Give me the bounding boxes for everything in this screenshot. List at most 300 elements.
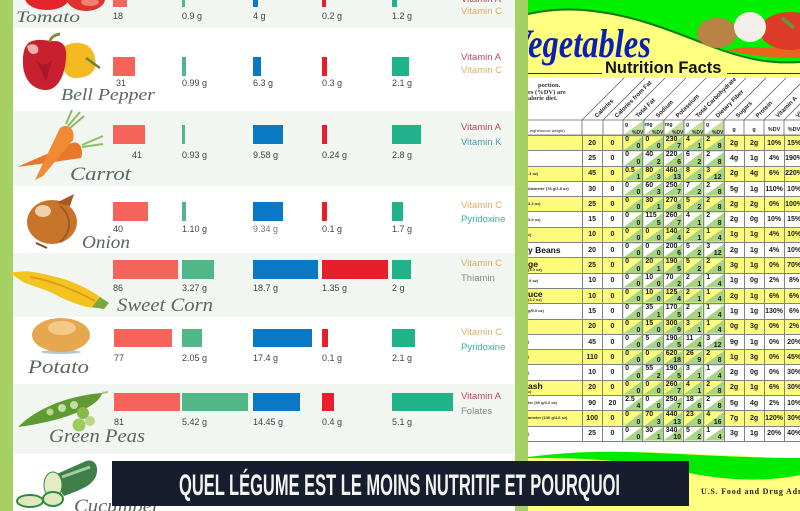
nutrition data table: 1g [750, 338, 758, 346]
nutrition data table: 0 [657, 403, 661, 410]
nutrition data table: 0% [769, 338, 779, 346]
nutrition data table: 25 [588, 262, 596, 269]
table column headers: mg [645, 122, 652, 128]
nutrition data table: 23 [686, 411, 694, 418]
nutrition data table: 0 [625, 136, 629, 143]
nutrition data table: 6 [677, 250, 681, 257]
nutrition data table: 0 [625, 274, 629, 281]
nutrition data table: 2 [706, 381, 710, 388]
table column headers: g [752, 127, 756, 133]
row: onion: 9.34 g [253, 224, 278, 234]
nutrition data table: 30 [588, 186, 596, 193]
nutrition data table: 13 [673, 174, 681, 181]
nutrition data table: 4 [718, 373, 722, 380]
nutrition data table: 0 [636, 235, 640, 242]
nutrition data table: 12 [714, 250, 722, 257]
row: green peas: 5.42 g [182, 417, 207, 427]
nutrition data table: 620 [666, 350, 677, 357]
nutrition data table: 440 [666, 411, 677, 418]
table column headers: Total Fat [635, 98, 657, 119]
nutrition data table: 10 [645, 274, 653, 281]
nutrition data table: 2% [769, 277, 779, 284]
row: potato: 17.4 g [253, 353, 278, 363]
nutrition data table: 8 [686, 167, 690, 174]
table column headers: eight/ounce weight) [530, 128, 565, 133]
row: sweet corn: Thiamin [461, 273, 495, 284]
table column headers: %DV [632, 130, 644, 136]
nutrition data table: 0 [610, 216, 614, 223]
nutrition data table: 1 [706, 289, 710, 296]
nutrition data table: 30 [645, 197, 653, 204]
nutrition data table: 15 [645, 320, 653, 327]
nutrition data table: 4% [769, 247, 779, 254]
row: sweet corn: Vitamin C [461, 258, 502, 269]
row: bell pepper: Vitamin C [461, 65, 502, 76]
nutrition data table: 2 [706, 212, 710, 219]
nutrition data table: 2 [657, 159, 661, 166]
row: sweet corn: 1.35 g [322, 283, 347, 293]
nutrition data table: 2% [789, 323, 799, 330]
nutrition data table: 0g [750, 216, 758, 223]
row: sweet corn: 2 g [392, 283, 405, 293]
nutrition data table: 10 [645, 289, 653, 296]
nutrition data table: 60 [645, 182, 653, 189]
nutrition data table: uce [528, 289, 543, 299]
row: tomato: 0.9 g [182, 11, 202, 21]
nutrition data table: 2 [706, 182, 710, 189]
nutrition data table: 0 [657, 296, 661, 303]
nutrition data table: 190 [666, 335, 677, 342]
nutrition data table: 1 [697, 373, 701, 380]
nutrition data table: 340 [666, 427, 677, 434]
row: onion: 0.1 g [322, 224, 342, 234]
row: carrot: 9.58 g [253, 150, 278, 160]
table column headers: g [732, 127, 736, 133]
nutrition data table: (3.0 oz) [528, 267, 542, 272]
nutrition data table: 1g [730, 277, 738, 284]
row: green peas: Vitamin A [461, 391, 501, 402]
nutrition data table: 8 [718, 143, 722, 150]
nutrition data table: 1 [706, 365, 710, 372]
nutrition data table: 0 [657, 388, 661, 395]
nutrition data table: 0g [750, 277, 758, 284]
nutrition data table: 1g [750, 293, 758, 300]
nutrition data table: diameter (78 g/2.8 oz) [528, 186, 569, 191]
nutrition data table: 1g [750, 155, 758, 162]
nutrition data table: 7 [686, 182, 690, 189]
nutrition data table: 1g [730, 308, 738, 315]
nutrition data table: 1 [657, 312, 661, 319]
nutrition data table: 0 [610, 277, 614, 284]
nutrition data table: 0 [636, 220, 640, 227]
nutrition data table: 0 [610, 415, 614, 422]
nutrition data table: 0 [625, 228, 629, 235]
nutrition data table: 5 [677, 312, 681, 319]
table column headers [528, 76, 800, 136]
nutrition data table: 2 [706, 350, 710, 357]
nutrition data table: 0 [636, 189, 640, 196]
nutrition data table: 0.5 [625, 167, 635, 174]
nutrition data table: 460 [666, 167, 677, 174]
nutrition data table: 0 [610, 170, 614, 177]
nutrition data table: 0 [636, 357, 640, 364]
nutrition data table: 7 [677, 403, 681, 410]
nutrition data table: 2 [686, 304, 690, 311]
row: bell pepper: Vitamin A [461, 52, 501, 63]
label: Bell Pepper: Bell Pepper [61, 85, 155, 104]
nutrition data table: 0 [625, 411, 629, 418]
nutrition data table: 1 [697, 388, 701, 395]
nutrition data table: 2g [750, 201, 758, 208]
nutrition data table: 170 [666, 304, 677, 311]
nutrition data table: 0 [625, 289, 629, 296]
vegetable illustrations and names [10, 0, 213, 511]
row: onion: 40 [113, 224, 123, 234]
nutrition data table: 0 [610, 262, 614, 269]
nutrition data table: 0 [636, 388, 640, 395]
nutrition data table: 4 [697, 342, 701, 349]
nutrition data table: 0 [610, 293, 614, 300]
row: bell pepper: 0.99 g [182, 78, 207, 88]
nutrition data table: 190 [666, 365, 677, 372]
nutrition data table: 10% [767, 140, 781, 147]
nutrition data table: 1g [750, 247, 758, 254]
row: carrot: Vitamin A [461, 122, 501, 133]
row: bell pepper: 0.3 g [322, 78, 342, 88]
nutrition data table: 9 [697, 357, 701, 364]
nutrition data table: 0 [657, 250, 661, 257]
nutrition data table: 0 [625, 304, 629, 311]
intro note: alorie diet. [528, 95, 558, 102]
poster illustration: vegetables [697, 12, 800, 58]
nutrition data table: 1 [697, 143, 701, 150]
icon: sweet corn [10, 271, 109, 309]
nutrition data table: 11 [686, 335, 693, 342]
nutrition data table: 1 [657, 204, 661, 211]
row: potato: 2.1 g [392, 353, 412, 363]
nutrition data table: 0 [610, 201, 614, 208]
side band right [515, 0, 528, 511]
nutrition data table: 18 [686, 396, 694, 403]
intro note [528, 82, 566, 102]
nutrition data table: 5 [686, 258, 690, 265]
table column headers: Potassium [675, 94, 701, 119]
row: green peas: 0.4 g [322, 417, 342, 427]
nutrition data table: 2 [697, 189, 701, 196]
nutrition data table: 120% [765, 415, 783, 422]
nutrition data table: 1 [697, 296, 701, 303]
nutrition data table: 220 [666, 151, 677, 158]
icon: carrot [17, 110, 103, 180]
nutrition data table: 90 [588, 400, 596, 407]
nutrition data table: 6% [789, 293, 799, 300]
nutrition data table: 2.5 [625, 396, 635, 403]
nutrition data table: 8 [718, 159, 722, 166]
row: potato: Pyridoxine [461, 342, 505, 353]
nutrition data table: ash [528, 381, 543, 391]
nutrition data table: 110 [586, 354, 598, 361]
row: carrot: 0.93 g [182, 150, 207, 160]
nutrition data table: 5g [730, 400, 738, 407]
nutrition data table: 0 [657, 235, 661, 242]
nutrition data table: 0 [610, 308, 614, 315]
nutrition data table: 25 [588, 155, 596, 162]
nutrition data table: 12 [714, 174, 722, 181]
nutrition data table: 270 [666, 197, 677, 204]
nutrition data table: 0 [610, 369, 614, 376]
nutrition data table: 100 [586, 415, 598, 422]
nutrition data table: 8 [718, 357, 722, 364]
row: bell pepper [113, 52, 502, 88]
nutrition data table: 1g [750, 231, 758, 238]
nutrition data table: 0% [769, 201, 779, 208]
nutrition data table: 20% [767, 430, 781, 437]
intro note: portion. [538, 82, 560, 89]
nutrition data table: 0 [657, 281, 661, 288]
nutrition data table: 7 [677, 220, 681, 227]
table column headers: Dietary Fiber [715, 89, 746, 119]
nutrition data table: 6 [677, 159, 681, 166]
nutrition data table: 0 [625, 350, 629, 357]
nutrition data table: 140 [666, 228, 677, 235]
nutrition data table: 3g [730, 430, 738, 437]
nutrition data table: 4% [769, 231, 779, 238]
nutrition data table: 20 [588, 384, 596, 391]
nutrition data table: z) [528, 232, 531, 237]
nutrition data table: 0 [610, 430, 614, 437]
row: tomato: 18 [113, 11, 123, 21]
nutrition data table: 13 [673, 419, 681, 426]
intro note: es (%DV) are [528, 88, 566, 96]
nutrition data table: 4 [686, 136, 690, 143]
nutrition data table: 4 [686, 212, 690, 219]
icon: potato [32, 318, 90, 354]
nutrition data table: 2% [769, 400, 779, 407]
nutrition data table [528, 135, 800, 442]
nutrition data table: 4 [718, 434, 722, 441]
nutrition data table: 1g [750, 430, 758, 437]
row: carrot: Vitamin K [461, 137, 501, 148]
nutrition data table: 8 [718, 189, 722, 196]
nutrition data table: 3 [657, 174, 661, 181]
nutrition data table: 5 [645, 335, 649, 342]
nutrition data table: 30 [645, 427, 653, 434]
nutrition data table: 80 [645, 167, 653, 174]
nutrition data table: 5g [730, 186, 738, 193]
nutrition data table: 110% [765, 186, 783, 193]
nutrition data table: 3g [730, 262, 738, 269]
nutrition data table: 4 [718, 296, 722, 303]
nutrition data table: 8 [718, 388, 722, 395]
nutrition data table: 0 [636, 250, 640, 257]
label: Green Peas: Green Peas [49, 426, 145, 447]
nutrition data table: 0% [769, 369, 779, 376]
nutrition data table: .3 oz) [528, 171, 538, 176]
nutrition data table: 10 [673, 434, 681, 441]
table column headers: %DV [652, 130, 664, 136]
nutrition data table: 3g [750, 354, 758, 361]
nutrition data table: 4 [718, 235, 722, 242]
nutrition data table: 4% [769, 155, 779, 162]
nutrition data table: 2g [750, 415, 758, 422]
nutrition data table: 2g [730, 140, 738, 147]
row: green peas: Folates [461, 406, 492, 417]
table column headers: Protein [755, 100, 774, 119]
nutrition data table: 0 [657, 327, 661, 334]
label: Potato: Potato [27, 357, 89, 378]
icon: green peas [18, 392, 108, 432]
nutrition data table: 55 [645, 365, 653, 372]
table column headers: Sugars [735, 100, 754, 119]
nutrition data table: 0 [636, 143, 640, 150]
row: potato [114, 327, 505, 363]
row: onion: 1.10 g [182, 224, 207, 234]
nutrition data table: 5 [686, 197, 690, 204]
heading rule left [528, 73, 602, 74]
nutrition data table: 2 [706, 136, 710, 143]
nutrition data table: 230 [666, 136, 677, 143]
nutrition data table: 4 [686, 381, 690, 388]
nutrition data table: 0 [625, 197, 629, 204]
nutrition data table: 0 [636, 281, 640, 288]
nutrition data table: 26 [686, 350, 694, 357]
nutrition data table: ) [528, 354, 529, 359]
nutrition data table: 0 [625, 258, 629, 265]
row: carrot: 2.8 g [392, 150, 412, 160]
nutrition data table: 0 [610, 140, 614, 147]
nutrition data table: 2 [706, 197, 710, 204]
nutrition data table: 25 [588, 201, 596, 208]
nutrition data table: 3 [657, 189, 661, 196]
nutrition data table: z) [528, 389, 531, 394]
icon: bell pepper [23, 34, 100, 90]
table column headers: Calories from Fat [614, 80, 653, 119]
nutrition data table: 20 [609, 400, 616, 407]
row: potato: 77 [114, 353, 124, 363]
nutrition data table: 70 [666, 274, 673, 281]
nutrition data table: 9 [677, 327, 681, 334]
nutrition data table: 0 [625, 381, 629, 388]
nutrition data table: 7 [677, 143, 681, 150]
nutrition data table: 4 [677, 296, 681, 303]
nutrition data table: 4 [718, 327, 722, 334]
nutrition data table: 3 [706, 243, 710, 250]
nutrition data table: 20 [588, 247, 596, 254]
nutrition data table: 1 [706, 228, 710, 235]
nutrition data table: 20 [588, 140, 596, 147]
nutrition data table: 0 [657, 357, 661, 364]
nutrition data table: 1g [730, 354, 738, 361]
nutrition data table: 1 [697, 281, 701, 288]
nutrition data table: 70 [645, 411, 653, 418]
nutrition data table: 0 [636, 342, 640, 349]
poster background curves [528, 0, 800, 480]
nutrition data table: 4g [730, 155, 738, 162]
nutrition data table: 0 [610, 384, 614, 391]
nutrition data table: ge [528, 259, 538, 269]
nutrition data table: 1 [697, 235, 701, 242]
nutrition data table: 2 [697, 250, 701, 257]
nutrition data table: 200 [666, 243, 677, 250]
nutrition data table: 8 [718, 403, 722, 410]
nutrition data table: 250 [666, 182, 677, 189]
nutrition data table: 0 [610, 323, 614, 330]
icon: onion [27, 194, 77, 248]
nutrition data table: 1 [657, 434, 661, 441]
nutrition data table: 20 [588, 323, 596, 330]
nutrition data table: 1 [697, 312, 701, 319]
nutrition data table: 1 [636, 174, 640, 181]
nutrition data table: 1g [750, 384, 758, 391]
nutrition data table: 10 [588, 293, 596, 300]
nutrition data table: 10 [588, 369, 596, 376]
right panel: vegetables nutrition facts poster [528, 0, 800, 511]
table column headers: Sodium [655, 100, 675, 119]
nutrition data table: g/5.0 oz) [528, 308, 544, 313]
nutrition data table: 8 [677, 204, 681, 211]
nutrition data table: 0 [610, 186, 614, 193]
nutrition data table: 4 [706, 411, 710, 418]
nutrition data table: .9 oz) [528, 278, 538, 283]
nutrition data table: 0 [636, 204, 640, 211]
nutrition data table: 1 [706, 320, 710, 327]
nutrition data table: 2 [686, 289, 690, 296]
nutrition data table: 0 [645, 396, 649, 403]
nutrition data table: 1 [697, 327, 701, 334]
nutrition data table: 0 [636, 312, 640, 319]
nutrition data table: 260 [666, 212, 677, 219]
nutrition data table: 2 [697, 204, 701, 211]
row: onion [113, 200, 505, 234]
nutrition data table: 40 [645, 151, 653, 158]
nutrition data table: 35 [645, 304, 653, 311]
nutrition data table: 0 [625, 243, 629, 250]
nutrition data table: 0 [657, 342, 661, 349]
icon: cucumber [17, 460, 97, 507]
table column headers: g [625, 122, 628, 128]
nutrition data table: 2 [657, 373, 661, 380]
nutrition data table: 260 [666, 381, 677, 388]
nutrition data table: 0 [645, 381, 649, 388]
row: onion: 1.7 g [392, 224, 412, 234]
nutrition data table: 7 [677, 388, 681, 395]
table column headers: %DV [692, 130, 704, 136]
row: sweet corn: 3.27 g [182, 283, 207, 293]
nutrition data table: ) [528, 339, 529, 344]
nutrition data table: 5 [657, 220, 661, 227]
nutrition data table: 0% [769, 354, 779, 361]
nutrition data table: 0 [625, 365, 629, 372]
nutrition data table: 4 [677, 235, 681, 242]
nutrition data table: 0 [610, 247, 614, 254]
nutrition data table: 1 [706, 427, 710, 434]
nutrition data table: 6% [789, 308, 799, 315]
nutrition data table: 0 [657, 143, 661, 150]
row: bell pepper: 2.1 g [392, 78, 412, 88]
table column headers: g [686, 122, 689, 128]
row: potato: Vitamin C [461, 327, 502, 338]
nutrition data table: 0g [750, 369, 758, 376]
nutrition data table: 7 [677, 189, 681, 196]
nutrition data table: 0 [610, 354, 614, 361]
nutrition data table: 3.3 oz) [528, 201, 540, 206]
nutrition data table: 1 [706, 274, 710, 281]
nutrition data table: 3 [706, 335, 710, 342]
nutrition data table: 2g [730, 369, 738, 376]
nutrition data table: 130% [765, 308, 783, 315]
table column headers: %DV [672, 130, 684, 136]
nutrition data table: 0g [730, 323, 738, 330]
